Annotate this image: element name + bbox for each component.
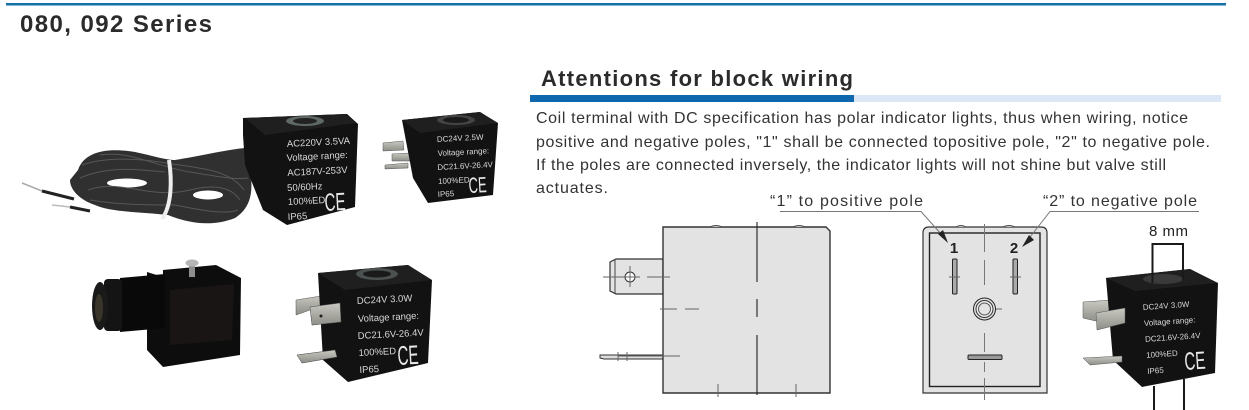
photo: coil with wire leads: 50/60Hz xyxy=(287,181,323,194)
photo: coil with 8 mm wire loop: DC21.6V-26.4V xyxy=(1145,331,1201,344)
wiring instructions text: actuates. xyxy=(536,180,608,197)
wiring instructions text: Coil terminal with DC specification has polar indicator lights, thus when wiring, notice xyxy=(536,110,1188,127)
photo: DC24V 2.5W coil: Voltage range: xyxy=(437,146,489,158)
photo: coil with wire leads: CE xyxy=(324,188,346,217)
photo: DC24V 3.0W coil: Voltage range: xyxy=(358,311,419,325)
photo: coil with 8 mm wire loop: IP65 xyxy=(1147,366,1165,376)
label: 1 to positive pole xyxy=(770,193,948,243)
photo: coil with wire leads: AC187V-253V xyxy=(287,165,348,179)
heading bar xyxy=(530,95,1221,102)
photo: coil with wire leads: IP65 xyxy=(287,211,308,223)
diagram: coil side view xyxy=(600,222,830,397)
label: 8 mm: 8 mm xyxy=(1149,223,1188,240)
heading: attentions for block wiring: Attentions for block wiring xyxy=(541,66,853,91)
photo: coil with wire leads: AC220V 3.5VA xyxy=(287,136,351,150)
diagram: coil terminal face view xyxy=(923,224,1047,400)
diagram: coil terminal face view: 2 xyxy=(1010,240,1018,257)
photo: coil with wire leads: 100%ED xyxy=(288,195,326,208)
diagram: coil terminal face view: 1 xyxy=(950,240,958,257)
photo: coil with 8 mm wire loop: CE xyxy=(1183,347,1206,376)
photo: DC24V 2.5W coil: 100%ED xyxy=(438,175,470,186)
photo: DC24V 3.0W coil: DC21.6V-26.4V xyxy=(357,328,425,342)
photo: coil with 8 mm wire loop: Voltage range: xyxy=(1144,315,1196,328)
wiring instructions text xyxy=(536,110,1210,197)
photo: DC24V 3.0W coil: IP65 xyxy=(359,364,379,376)
photo: DC24V 3.0W coil: CE xyxy=(397,340,419,371)
photo: DC24V 2.5W coil: IP65 xyxy=(438,189,455,199)
photo: coil with wire leads: Voltage range: xyxy=(286,150,348,164)
photo: coil with wire leads xyxy=(22,114,358,225)
wiring instructions text: If the poles are connected inversely, the indicator lights will not shine but valve still xyxy=(536,157,1166,174)
label: 1 to positive pole: “1” to positive pole xyxy=(770,193,923,210)
title: 080, 092 Series xyxy=(20,11,212,38)
photo: coil with 8 mm wire loop xyxy=(1083,244,1218,410)
photo: DC24V 2.5W coil: DC21.6V-26.4V xyxy=(437,160,494,172)
photo: DC24V 2.5W coil: DC24V 2.5W xyxy=(437,133,484,144)
photo: DC24V 2.5W coil: CE xyxy=(468,172,487,198)
wiring instructions text: positive and negative poles, "1" shall be connected topositive pole, "2" to negative pole. xyxy=(536,134,1210,151)
photo: DC24V 3.0W coil: DC24V 3.0W xyxy=(357,293,413,307)
photo: DC24V 3.0W coil: 100%ED xyxy=(358,346,397,359)
photo: coil with 8 mm wire loop: DC24V 3.0W xyxy=(1143,300,1190,312)
photo: DC24V 2.5W coil xyxy=(383,112,498,203)
photo: DC24V 3.0W coil xyxy=(296,265,432,382)
label: 2 to negative pole xyxy=(1022,193,1199,247)
label: 2 to negative pole: “2” to negative pole xyxy=(1043,193,1197,210)
photo: connector coil xyxy=(92,260,241,367)
photo: coil with 8 mm wire loop: 100%ED xyxy=(1146,349,1178,360)
